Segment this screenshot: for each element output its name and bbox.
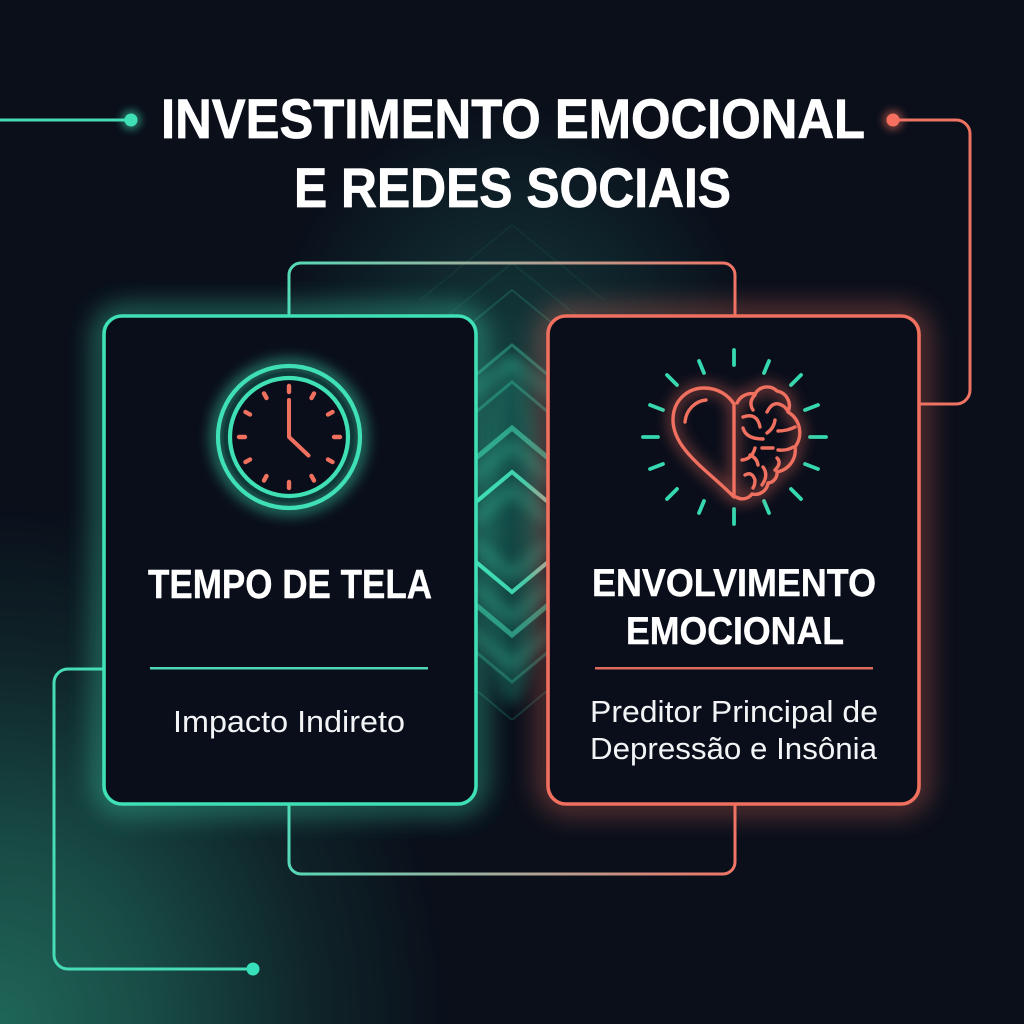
- divider: [150, 667, 428, 670]
- divider: [595, 667, 873, 670]
- description: preditor principal: Depressão e Insônia: [590, 731, 878, 766]
- description: preditor principal: Preditor Principal de: [590, 694, 878, 729]
- heading: tempo de tela: TEMPO DE TELA: [148, 561, 432, 607]
- icon: heart and brain: [643, 350, 826, 524]
- connector: bottom link between panels: [289, 804, 735, 874]
- rays: [643, 350, 826, 524]
- faint chevrons above panels: [420, 225, 604, 349]
- heading: envolvimento emocional: ENVOLVIMENTO: [592, 562, 876, 605]
- title: INVESTIMENTO EMOCIONAL: [161, 87, 865, 150]
- panel: envolvimento emocional: [548, 316, 919, 804]
- heading: envolvimento emocional: EMOCIONAL: [626, 610, 844, 653]
- description: preditor principal: [590, 694, 878, 766]
- connector: top right line with node: [883, 110, 970, 404]
- title: E REDES SOCIAIS: [294, 156, 731, 219]
- title: [161, 87, 865, 219]
- connector: bottom left line with node: [54, 669, 260, 976]
- chevron connector between panels: [478, 343, 546, 720]
- heading: envolvimento emocional: [592, 562, 876, 653]
- connector: top left line with node: [0, 110, 141, 130]
- heart and brain lines: [673, 387, 800, 499]
- icon: clock: [217, 365, 361, 509]
- description: impacto indireto: Impacto Indireto: [173, 704, 405, 739]
- panel: tempo de tela: [104, 316, 476, 804]
- connector: top link between panels: [289, 263, 735, 316]
